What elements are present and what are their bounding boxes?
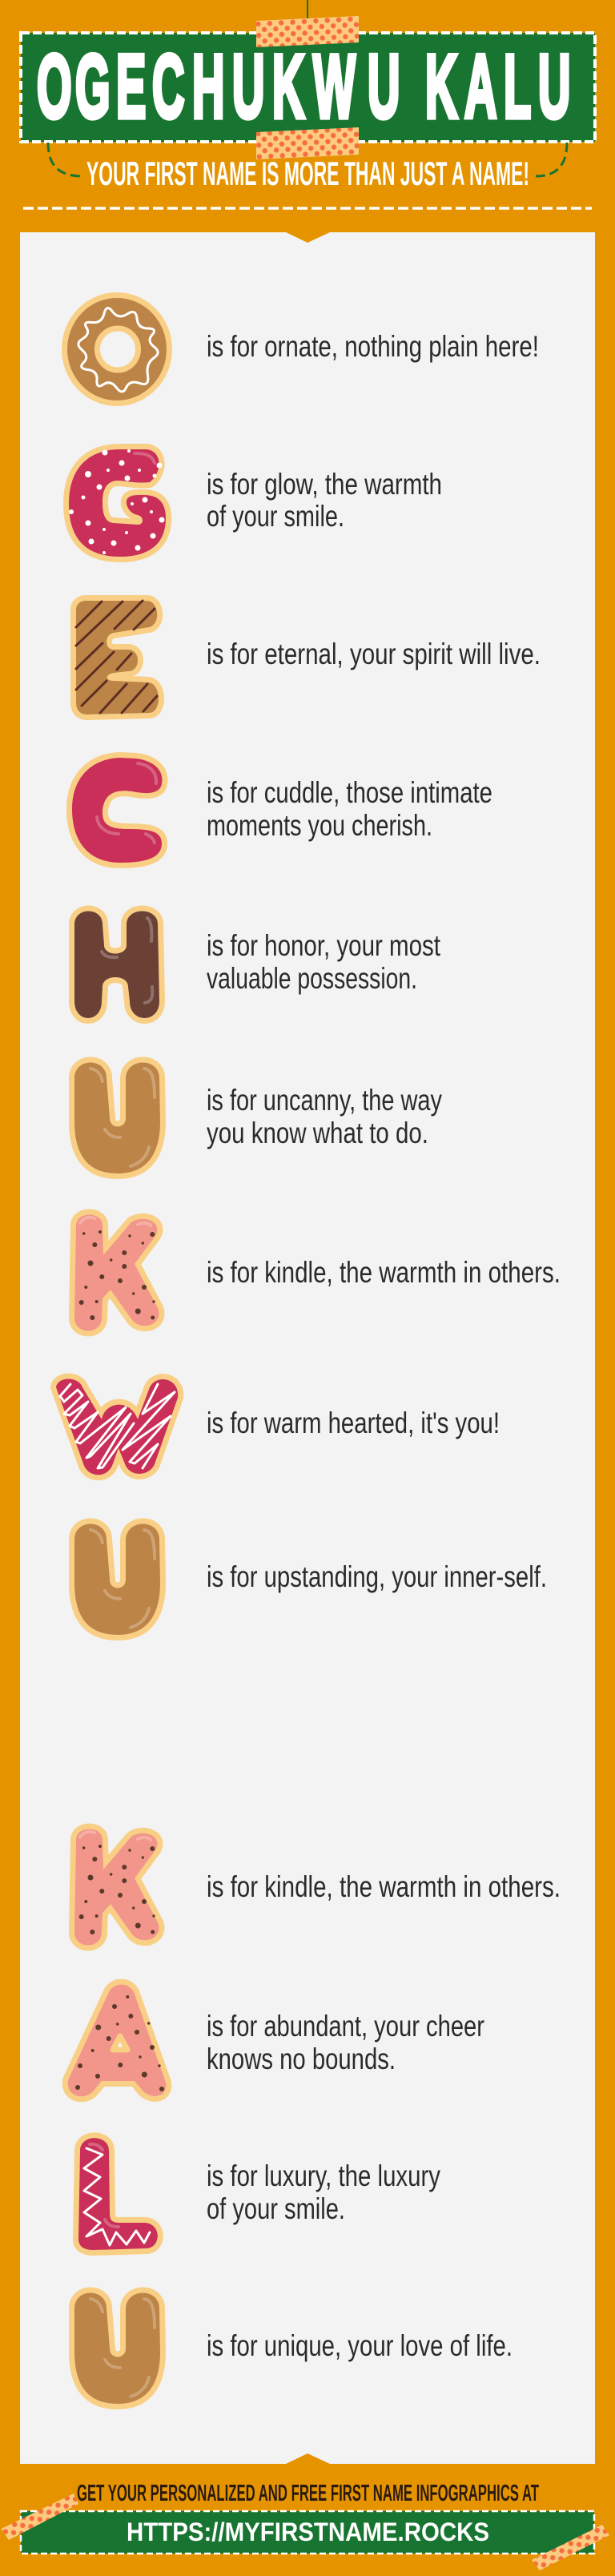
letter K <box>74 1214 159 1331</box>
letter W <box>56 1379 178 1475</box>
text: G: of your smile. <box>207 500 344 533</box>
letter U <box>74 1062 160 1173</box>
text: C: moments you cherish. <box>207 809 432 842</box>
footer url: HTTPS://MYFIRSTNAME.ROCKS <box>127 2518 489 2546</box>
tape: footer right <box>532 2525 609 2570</box>
text: C <box>207 776 492 842</box>
text: U <box>207 1084 442 1149</box>
text: H: valuable possession. <box>207 962 417 995</box>
text: H: is for honor, your most <box>207 929 441 962</box>
text: U: is for uncanny, the way <box>207 1084 442 1117</box>
text: A <box>207 2010 484 2075</box>
hanging thread <box>307 0 308 19</box>
text: U: you know what to do. <box>207 1117 428 1149</box>
text: O: is for ornate, nothing plain here! <box>207 330 539 363</box>
title: OGECHUKWU KALU <box>37 36 570 137</box>
text: A: knows no bounds. <box>207 2043 396 2075</box>
text: W: is for warm hearted, it's you! <box>207 1407 500 1439</box>
letter E <box>76 601 159 714</box>
text: A: is for abundant, your cheer <box>207 2010 484 2043</box>
text: L <box>207 2159 440 2225</box>
text: E: is for eternal, your spirit will live. <box>207 638 541 670</box>
text: H <box>207 929 441 995</box>
letter U second <box>74 1523 160 1635</box>
tape: bottom <box>256 127 359 159</box>
text: G <box>207 468 442 533</box>
subtitle connector left <box>48 143 82 176</box>
tape: footer left <box>2 2493 78 2540</box>
letter O <box>67 298 167 400</box>
letter H <box>74 912 159 1018</box>
text: L: is for luxury, the luxury <box>207 2159 440 2192</box>
footer banner <box>21 2511 594 2554</box>
text: C: is for cuddle, those intimate <box>207 776 492 809</box>
letter G <box>69 449 166 557</box>
tape: top <box>256 16 359 47</box>
title banner <box>21 33 595 142</box>
letter U third <box>74 2292 160 2404</box>
text: G: is for glow, the warmth <box>207 468 442 501</box>
text: U third: is for unique, your love of life. <box>207 2329 512 2362</box>
letter A <box>68 1985 166 2096</box>
letter K second <box>74 1829 159 1945</box>
subtitle connector right <box>536 143 567 176</box>
dashed divider <box>23 207 592 210</box>
letter L <box>78 2138 158 2250</box>
text: L: of your smile. <box>207 2192 345 2225</box>
letter C <box>72 758 163 863</box>
